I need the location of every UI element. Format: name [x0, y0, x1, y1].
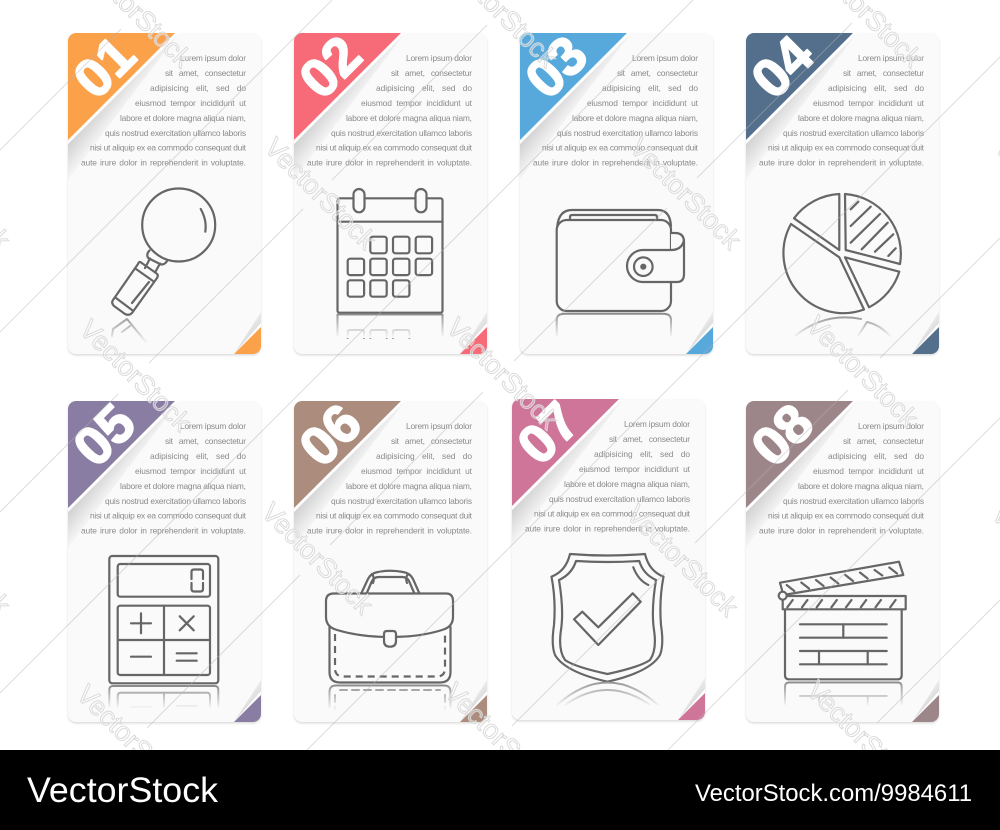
- text block: adipisicing elit, sed do: [376, 451, 472, 461]
- text block: [525, 419, 691, 534]
- watermark text: VectorStock: [441, 312, 564, 435]
- text block: sit amet, consectetur: [609, 434, 690, 444]
- text block: Lorem ipsum dolor: [858, 421, 924, 431]
- text block: [307, 53, 473, 168]
- text block: sit amet, consectetur: [165, 436, 246, 446]
- panel: card 06 briefcase: [288, 393, 487, 724]
- text block: [759, 53, 925, 168]
- text block: adipisicing elit, sed do: [828, 451, 924, 461]
- icon: calendar: [332, 189, 448, 338]
- number 01: 01: [62, 25, 147, 110]
- text block: adipisicing elit, sed do: [150, 83, 246, 93]
- icon: magnifying glass: [105, 188, 215, 344]
- text block: quis nostrud exercitation ullamco laboris: [549, 494, 690, 504]
- text block: nisi ut aliquip ex ea commodo consequat duit: [542, 142, 699, 152]
- text block: aute irure dolor in reprehenderit in voluptate.: [525, 524, 690, 534]
- text block: nisi ut aliquip ex ea commodo consequat duit: [316, 510, 473, 520]
- text block: adipisicing elit, sed do: [376, 83, 472, 93]
- text block: nisi ut aliquip ex ea commodo consequat duit: [316, 142, 473, 152]
- text block: Lorem ipsum dolor: [624, 419, 690, 429]
- text block: aute irure dolor in reprehenderit in voluptate.: [81, 526, 246, 536]
- text block: adipisicing elit, sed do: [594, 449, 690, 459]
- icon: calculator: [105, 556, 223, 709]
- text block: [81, 421, 247, 536]
- watermark text: VectorStock: [439, 677, 562, 800]
- text block: quis nostrud exercitation ullamco laboris: [105, 496, 246, 506]
- number 06: 06: [288, 393, 373, 478]
- text block: Lorem ipsum dolor: [180, 421, 246, 431]
- text block: aute irure dolor in reprehenderit in voluptate.: [759, 526, 924, 536]
- watermark text: VectorStock: [256, 497, 379, 620]
- text block: sit amet, consectetur: [843, 436, 924, 446]
- text block: labore et dolore magna aliqua niam,: [120, 481, 246, 491]
- text block: aute irure dolor in reprehenderit in voluptate.: [307, 158, 472, 168]
- text block: quis nostrud exercitation ullamco laboris: [331, 496, 472, 506]
- text block: aute irure dolor in reprehenderit in voluptate.: [759, 158, 924, 168]
- text block: adipisicing elit, sed do: [828, 83, 924, 93]
- text block: labore et dolore magna aliqua niam,: [798, 113, 924, 123]
- text block: adipisicing elit, sed do: [602, 83, 698, 93]
- number 08: 08: [740, 393, 825, 478]
- footer url text: VectorStock.com/9984611: [695, 780, 972, 807]
- text block: labore et dolore magna aliqua niam,: [346, 481, 472, 491]
- text block: quis nostrud exercitation ullamco laboris: [783, 496, 924, 506]
- text block: quis nostrud exercitation ullamco laboris: [557, 128, 698, 138]
- text block: sit amet, consectetur: [617, 68, 698, 78]
- text block: [533, 53, 699, 168]
- icon: briefcase: [325, 571, 455, 711]
- icon: pie chart: [783, 194, 901, 338]
- text block: Lorem ipsum dolor: [858, 53, 924, 63]
- text block: eiusmod tempor incididunt ut: [135, 98, 247, 108]
- watermark text: VectorStock: [74, 314, 197, 437]
- number 04: 04: [740, 25, 825, 110]
- number 05: 05: [62, 393, 147, 478]
- icon: clapperboard: [779, 562, 906, 707]
- text block: eiusmod tempor incididunt ut: [361, 98, 473, 108]
- text block: labore et dolore magna aliqua niam,: [120, 113, 246, 123]
- text block: Lorem ipsum dolor: [406, 53, 472, 63]
- text block: sit amet, consectetur: [165, 68, 246, 78]
- text block: labore et dolore magna aliqua niam,: [798, 481, 924, 491]
- text block: nisi ut aliquip ex ea commodo consequat duit: [90, 510, 247, 520]
- text block: sit amet, consectetur: [391, 436, 472, 446]
- number 07: 07: [506, 391, 591, 476]
- text block: aute irure dolor in reprehenderit in voluptate.: [533, 158, 698, 168]
- number 03: 03: [514, 25, 599, 110]
- text block: nisi ut aliquip ex ea commodo consequat duit: [768, 142, 925, 152]
- text block: labore et dolore magna aliqua niam,: [346, 113, 472, 123]
- text block: quis nostrud exercitation ullamco laboris: [331, 128, 472, 138]
- text block: Lorem ipsum dolor: [180, 53, 246, 63]
- text block: quis nostrud exercitation ullamco laboris: [105, 128, 246, 138]
- watermark text: VectorStock: [801, 675, 924, 798]
- text block: eiusmod tempor incididunt ut: [587, 98, 699, 108]
- text block: eiusmod tempor incididunt ut: [579, 464, 691, 474]
- text block: nisi ut aliquip ex ea commodo consequat duit: [534, 508, 691, 518]
- watermark text: VectorStock: [624, 132, 747, 255]
- text block: adipisicing elit, sed do: [150, 451, 246, 461]
- text block: Lorem ipsum dolor: [406, 421, 472, 431]
- text block: eiusmod tempor incididunt ut: [813, 466, 925, 476]
- text block: [307, 421, 473, 536]
- text block: [81, 53, 247, 168]
- watermark text: VectorStock: [801, 310, 924, 433]
- text block: nisi ut aliquip ex ea commodo consequat duit: [768, 510, 925, 520]
- watermark text: VectorStock: [71, 679, 194, 802]
- text block: aute irure dolor in reprehenderit in voluptate.: [307, 526, 472, 536]
- text block: sit amet, consectetur: [391, 68, 472, 78]
- watermark text: VectorStock: [259, 132, 382, 255]
- footer logo text: VectorStock: [27, 771, 219, 810]
- watermark text: VectorStock: [621, 499, 744, 622]
- text block: labore et dolore magna aliqua niam,: [572, 113, 698, 123]
- text block: quis nostrud exercitation ullamco laboris: [783, 128, 924, 138]
- panel: card 03 wallet: [514, 25, 713, 355]
- number 02: 02: [288, 25, 373, 110]
- text block: eiusmod tempor incididunt ut: [135, 466, 247, 476]
- text block: aute irure dolor in reprehenderit in voluptate.: [81, 158, 246, 168]
- panel: card 08 clapperboard: [740, 393, 939, 724]
- icon: shield with check mark: [552, 554, 664, 707]
- text block: Lorem ipsum dolor: [632, 53, 698, 63]
- panel: card 02 calendar: [288, 25, 487, 355]
- text block: labore et dolore magna aliqua niam,: [564, 479, 690, 489]
- text block: nisi ut aliquip ex ea commodo consequat duit: [90, 142, 247, 152]
- text block: sit amet, consectetur: [843, 68, 924, 78]
- text block: eiusmod tempor incididunt ut: [813, 98, 925, 108]
- icon: wallet: [552, 210, 684, 338]
- text block: eiusmod tempor incididunt ut: [361, 466, 473, 476]
- panel: card 07 shield: [506, 391, 705, 722]
- panel: card 04 pie chart: [740, 25, 939, 355]
- text block: [759, 421, 925, 536]
- panel: card 01 magnifier: [62, 25, 261, 355]
- panel: card 05 calculator: [62, 393, 261, 724]
- footer band: [0, 750, 1000, 830]
